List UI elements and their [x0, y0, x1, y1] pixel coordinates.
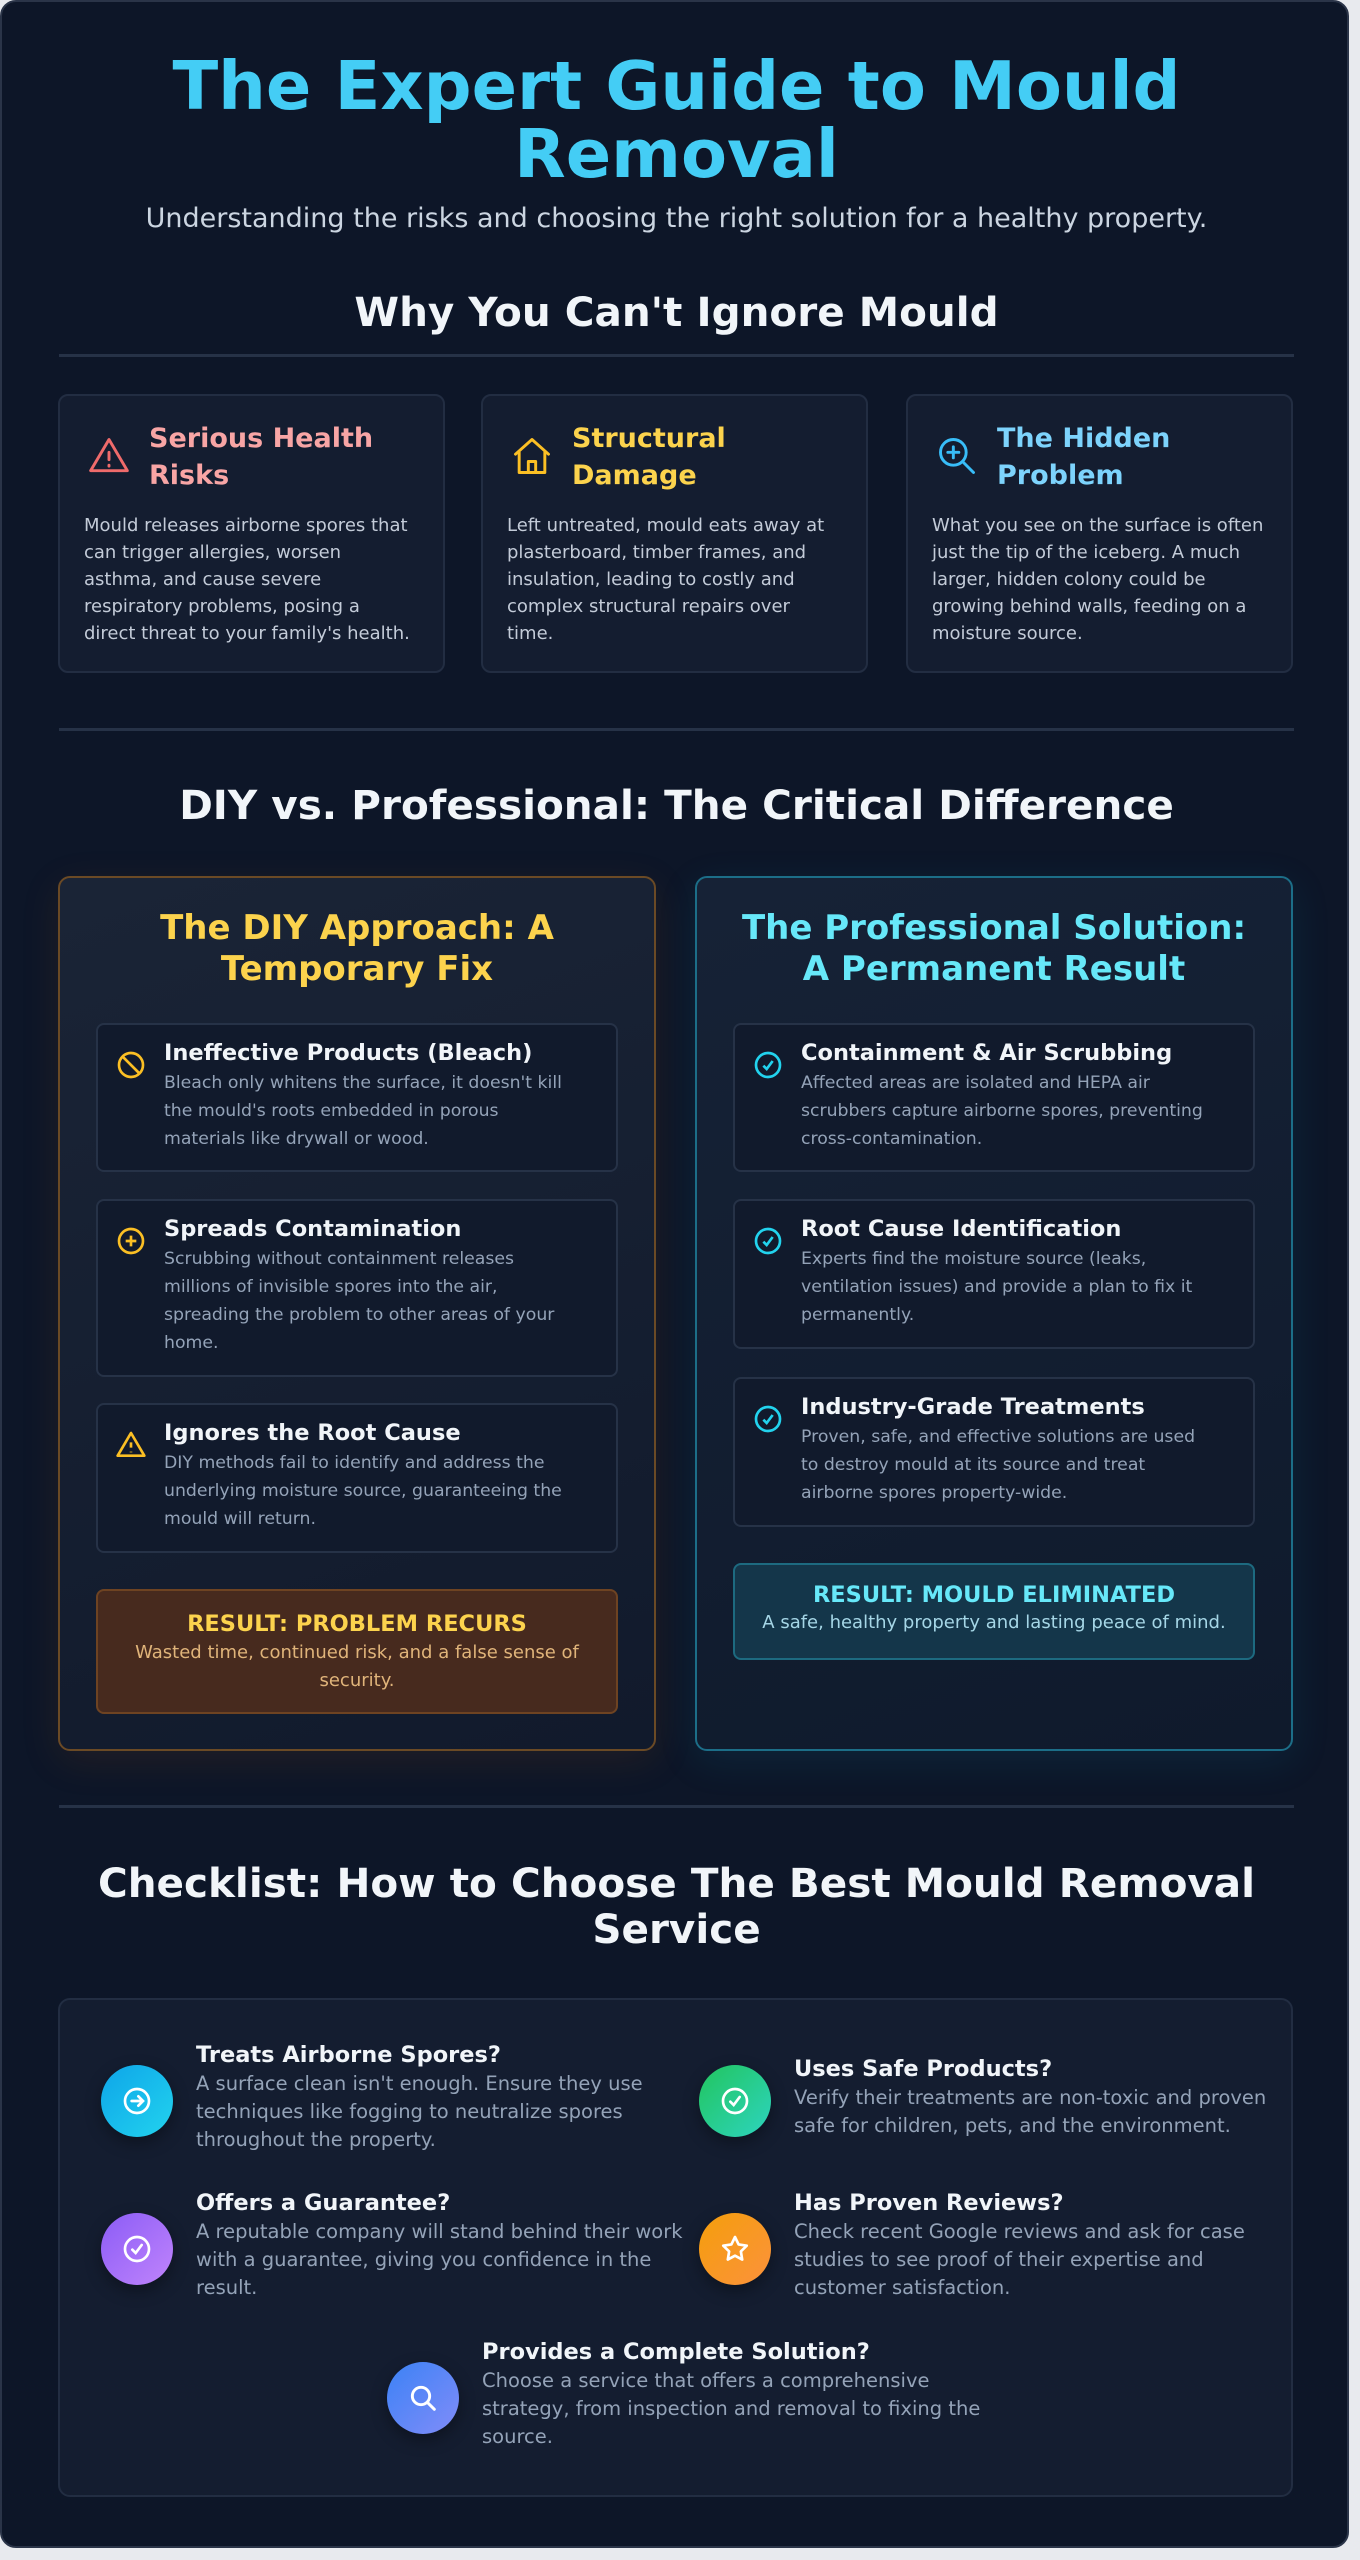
icon: plus — [118, 1228, 144, 1254]
callout: result recurs: RESULT: PROBLEM RECURS — [187, 1611, 527, 1637]
item: complete solution — [387, 2339, 980, 2448]
panel: checklist: Choose a service that offers a comprehensive strategy, from inspection and removal to fixing the source. — [482, 2369, 980, 2448]
item: root cause id — [733, 1199, 1255, 1349]
callout: result eliminated — [733, 1563, 1255, 1660]
item: root cause: DIY methods fail to identify and address the underlying moisture source, guaranteeing the mould will return. — [164, 1453, 562, 1529]
item: treatments — [733, 1377, 1255, 1527]
item: root cause — [96, 1403, 618, 1553]
callout: result recurs: Wasted time, continued risk, and a false sense of security. — [135, 1642, 579, 1691]
callout: result recurs — [96, 1589, 618, 1714]
heading: A Permanent Result — [803, 949, 1185, 989]
text: Left untreated, mould eats away at plasterboard, timber frames, and insulation, leading to costly and complex structural repairs over time. — [507, 515, 824, 644]
icon: star — [699, 2213, 771, 2285]
panel: checklist: Has Proven Reviews? — [794, 2190, 1064, 2216]
subtitle: Understanding the risks and choosing the right solution for a healthy property. — [146, 203, 1207, 234]
panel: DIY — [58, 876, 656, 1751]
icon: warning — [116, 1432, 146, 1457]
heading: The Professional Solution: — [742, 908, 1246, 948]
title: The Expert Guide to Mould — [172, 47, 1181, 125]
item: spreads: Spreads Contamination — [164, 1216, 461, 1242]
heading — [149, 423, 373, 491]
panel: checklist: Check recent Google reviews and ask for case studies to see proof of their expertise and customer satisfaction. — [794, 2220, 1245, 2299]
icon: check — [754, 1228, 782, 1254]
item: guarantee — [101, 2190, 683, 2299]
item: bleach — [96, 1023, 618, 1172]
item: root cause: Ignores the Root Cause — [164, 1420, 461, 1446]
title: Removal — [514, 115, 839, 193]
icon: house — [514, 438, 550, 474]
item: root cause id: Root Cause Identification — [801, 1216, 1121, 1242]
item: treatments: Proven, safe, and effective solutions are used to destroy mould at its source and treat airborne spores property-wide. — [801, 1427, 1195, 1503]
panel: checklist: Verify their treatments are non-toxic and proven safe for children, pets, and the environment. — [794, 2086, 1266, 2137]
item: root cause id: Experts find the moisture source (leaks, ventilation issues) and provide a plan to fix it permanently. — [801, 1249, 1192, 1325]
text: What you see on the surface is often just the tip of the iceberg. A much larger, hidden colony could be growing behind walls, feeding on a moisture source. — [932, 515, 1263, 644]
item: bleach: Ineffective Products (Bleach) — [164, 1040, 532, 1066]
item: bleach: Bleach only whitens the surface, it doesn't kill the mould's roots embedded in porous materials like drywall or wood. — [164, 1073, 562, 1149]
item: spreads — [96, 1199, 618, 1377]
panel: checklist: Uses Safe Products? — [794, 2056, 1052, 2082]
heading: Temporary Fix — [221, 949, 493, 989]
heading: Risks — [149, 460, 229, 491]
panel: structural damage — [481, 394, 868, 673]
heading: why ignore: Why You Can't Ignore Mould — [354, 288, 999, 336]
icon: check — [101, 2213, 173, 2285]
heading — [742, 908, 1246, 989]
heading: Structural — [572, 423, 726, 454]
panel: checklist — [58, 1998, 1293, 2497]
icon: ban — [118, 1052, 144, 1078]
icon: check — [754, 1406, 782, 1432]
item: containment: Containment & Air Scrubbing — [801, 1040, 1172, 1066]
item: containment — [733, 1023, 1255, 1172]
icon: warning — [89, 438, 129, 472]
icon: zoom — [939, 438, 975, 474]
heading — [572, 423, 726, 491]
panel: checklist: A surface clean isn't enough. Ensure they use techniques like fogging to neutralize spores throughout the property. — [196, 2072, 643, 2151]
icon: arrow circle — [101, 2065, 173, 2137]
icon: search — [387, 2362, 459, 2434]
heading: Problem — [997, 460, 1124, 491]
item: spreads: Scrubbing without containment releases millions of invisible spores into the air, spreading the problem to other areas of your home. — [164, 1249, 554, 1353]
item: airborne — [101, 2042, 643, 2151]
panel: health risks — [58, 394, 445, 673]
icon: check — [754, 1052, 782, 1078]
heading: Serious Health — [149, 423, 373, 454]
panel: hidden problem — [906, 394, 1293, 673]
panel: checklist: Offers a Guarantee? — [196, 2190, 450, 2216]
panel: checklist: Treats Airborne Spores? — [196, 2042, 501, 2068]
panel: checklist: Provides a Complete Solution? — [482, 2339, 870, 2365]
heading: The Hidden — [997, 423, 1170, 454]
heading: Damage — [572, 460, 697, 491]
item: treatments: Industry-Grade Treatments — [801, 1394, 1145, 1420]
text: Mould releases airborne spores that can trigger allergies, worsen asthma, and cause severe respiratory problems, posing a direct threat to your family's health. — [84, 515, 410, 644]
heading: DIY vs pro: DIY vs. Professional: The Critical Difference — [179, 781, 1174, 829]
heading: checklist: Checklist: How to Choose The Best Mould Removal Service — [98, 1859, 1255, 1953]
callout: result eliminated: RESULT: MOULD ELIMINATED — [813, 1582, 1175, 1608]
title — [172, 47, 1181, 193]
panel: professional — [695, 876, 1293, 1751]
heading — [997, 423, 1170, 491]
callout: result eliminated: A safe, healthy property and lasting peace of mind. — [762, 1612, 1226, 1633]
item: containment: Affected areas are isolated and HEPA air scrubbers capture airborne spores, preventing cross-contamination. — [801, 1073, 1203, 1149]
panel: checklist: A reputable company will stand behind their work with a guarantee, giving you confidence in the result. — [196, 2220, 683, 2299]
item: safe products — [699, 2056, 1266, 2142]
icon: check — [699, 2065, 771, 2137]
heading: The DIY Approach: A — [160, 908, 554, 948]
item: reviews — [699, 2190, 1245, 2299]
heading — [160, 908, 554, 989]
